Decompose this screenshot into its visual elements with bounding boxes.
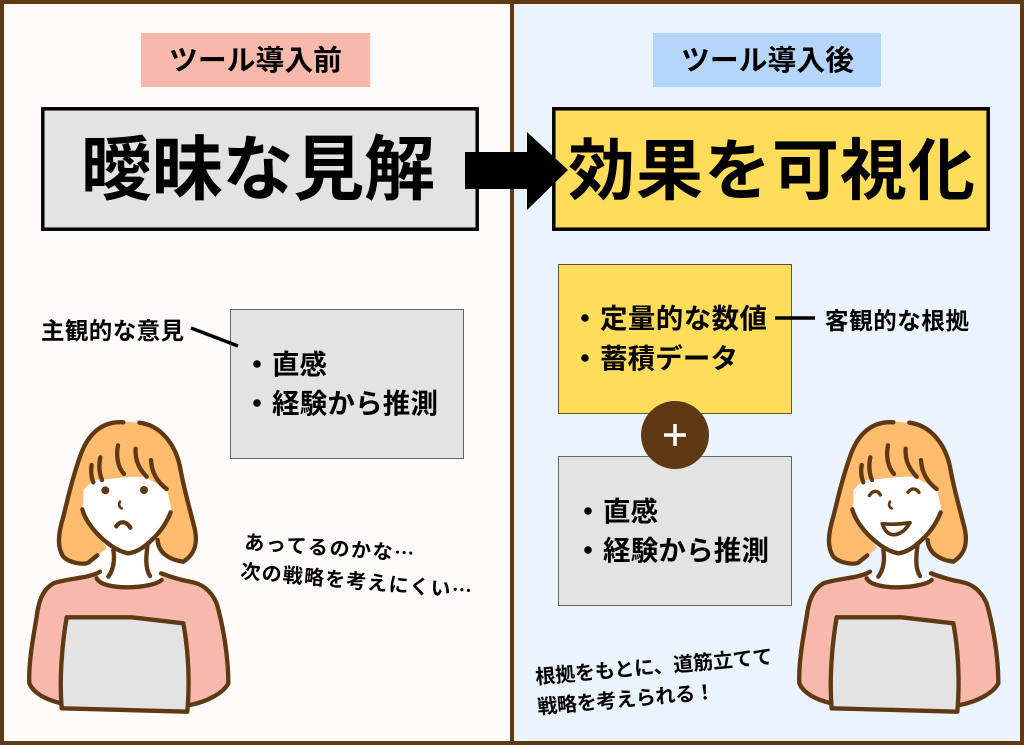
speech: confident: 戦略を考えられる！ bbox=[536, 680, 716, 719]
box: intuition and experience (before) bbox=[230, 310, 464, 458]
main label: ambiguous view: 曖昧な見解 bbox=[81, 131, 435, 210]
box: intuition and experience (after): 直感 bbox=[603, 496, 658, 527]
main label: ambiguous view bbox=[43, 109, 477, 229]
heading: after tool bbox=[653, 33, 881, 87]
box: intuition and experience (before): 直感 bbox=[272, 349, 327, 380]
box: intuition and experience (after) bbox=[558, 456, 792, 606]
heading: before tool: ツール導入前 bbox=[169, 45, 342, 77]
heading: after tool: ツール導入後 bbox=[681, 45, 854, 77]
box: intuition and experience (after): 経験から推測 bbox=[603, 535, 769, 566]
heading: before tool bbox=[141, 33, 370, 87]
speech: confident bbox=[534, 645, 774, 719]
main label: visualize effect: 効果を可視化 bbox=[568, 134, 975, 209]
annotation: subjective opinion: 主観的な意見 bbox=[41, 318, 184, 344]
annotation: subjective opinion bbox=[41, 318, 238, 346]
box: quantitative data: 定量的な数値 bbox=[600, 303, 767, 334]
annotation: objective evidence: 客観的な根拠 bbox=[825, 308, 970, 334]
icon: plus bbox=[641, 401, 709, 469]
speech: unsure: あってるのかな… bbox=[244, 526, 415, 567]
panel: after tool background bbox=[512, 0, 1024, 745]
box: quantitative data: 蓄積データ bbox=[600, 343, 738, 374]
speech: unsure: 次の戦略を考えにくい… bbox=[239, 555, 473, 604]
icon: worried woman bbox=[29, 422, 228, 712]
icon: smiling woman bbox=[799, 422, 998, 712]
panel: before tool background bbox=[0, 0, 512, 745]
speech: confident: 根拠をもとに、道筋立てて bbox=[534, 645, 774, 689]
box: intuition and experience (before): 経験から推測 bbox=[272, 388, 438, 419]
main label: visualize effect bbox=[554, 109, 988, 229]
arrow bbox=[465, 132, 568, 210]
box: quantitative data bbox=[558, 264, 792, 414]
speech: unsure bbox=[239, 526, 473, 604]
